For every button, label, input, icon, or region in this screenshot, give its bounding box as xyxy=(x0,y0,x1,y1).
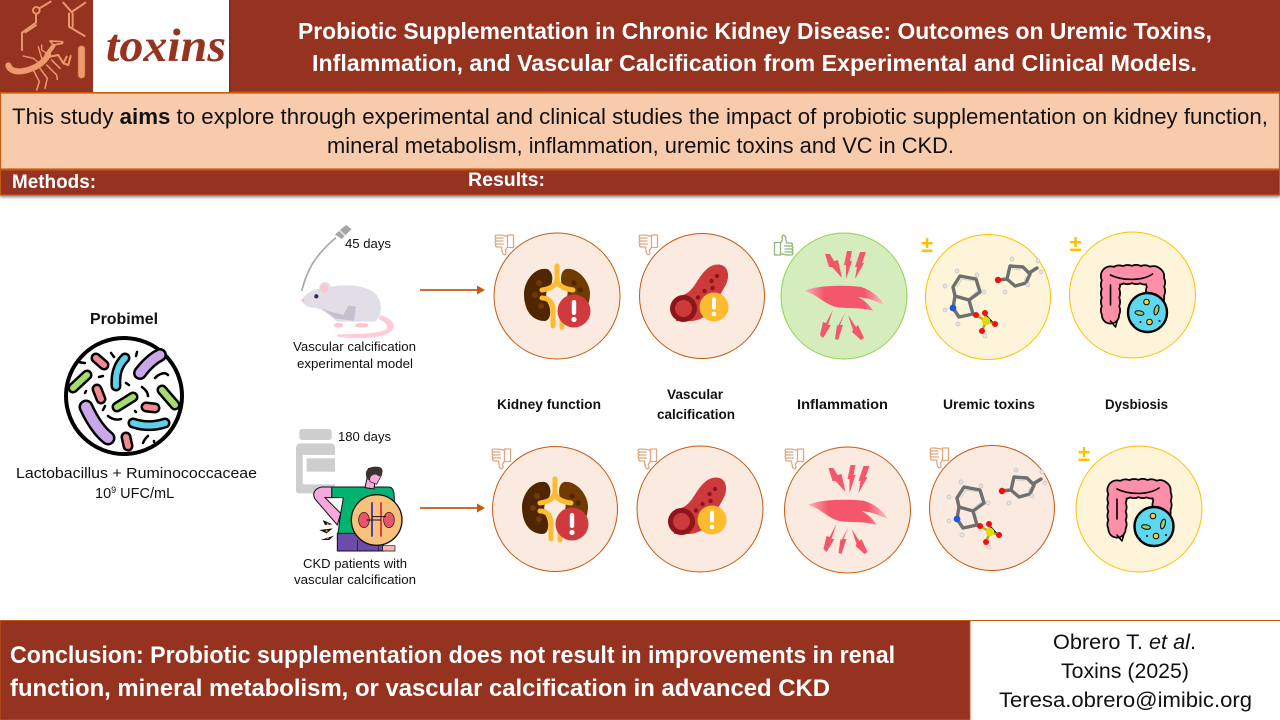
arrow: mouse to results xyxy=(420,286,485,294)
experimental model: mouse: Vascular calcification xyxy=(293,339,416,354)
conclusion panel xyxy=(0,620,970,720)
probiotic: Probimel: 10 xyxy=(95,486,111,502)
icon: syringe and mouse xyxy=(301,225,394,338)
result: dysbiosis, experimental xyxy=(1069,231,1196,358)
outcome labels: Dysbiosis xyxy=(1105,396,1168,412)
citation box xyxy=(970,620,1280,712)
conclusion panel: Conclusion: Probiotic supplementation does not result in improvements in renal xyxy=(10,642,895,669)
result: dysbiosis, clinical xyxy=(1076,441,1202,572)
result: uremic toxins, clinical xyxy=(930,446,1054,570)
journal logo: toxins xyxy=(0,0,230,92)
outcome labels: Inflammation xyxy=(797,396,888,412)
probiotic: Probimel xyxy=(16,311,257,502)
clinical model: patient: vascular calcification xyxy=(294,572,416,587)
outcome labels xyxy=(497,386,1168,422)
outcome labels: Kidney function xyxy=(497,396,601,412)
probiotic: Probimel: Probimel xyxy=(90,311,158,328)
clinical model: patient xyxy=(294,429,416,587)
experimental model: mouse: 45 days xyxy=(345,236,391,251)
citation box: Obrero T. et al. xyxy=(1053,631,1196,654)
aim statement panel: mineral metabolism, inflammation, uremic toxins and VC in CKD. xyxy=(327,133,954,158)
section bar: methods and results: Results: xyxy=(468,170,545,191)
section bar: methods and results xyxy=(0,170,1280,195)
conclusion panel: function, mineral metabolism, or vascular calcification in advanced CKD xyxy=(10,675,830,702)
journal logo: toxins: toxins xyxy=(106,20,226,72)
experimental model: mouse xyxy=(293,225,416,371)
probiotic: Probimel: 9 xyxy=(111,485,116,495)
arrow: patient to results xyxy=(420,504,485,512)
result: inflammation, experimental xyxy=(774,233,907,359)
citation box: Teresa.obrero@imibic.org xyxy=(999,689,1252,712)
header band xyxy=(0,0,1280,93)
probiotic: Probimel: UFC/mL xyxy=(116,486,174,502)
title xyxy=(298,18,1212,76)
probiotic: Probimel: Lactobacillus + Ruminococcaceae xyxy=(16,466,257,482)
title: Inflammation, and Vascular Calcification from Experimental and Clinical Models. xyxy=(312,50,1197,76)
citation box: Toxins (2025) xyxy=(1061,660,1189,683)
clinical model: patient: 180 days xyxy=(338,429,391,444)
result: inflammation, clinical xyxy=(784,447,910,573)
outcome labels: calcification xyxy=(657,406,735,422)
outcome labels: Uremic toxins xyxy=(943,396,1035,412)
clinical model: patient: CKD patients with xyxy=(303,556,407,571)
result: vascular calcification, experimental xyxy=(639,234,764,358)
title: Probiotic Supplementation in Chronic Kidney Disease: Outcomes on Uremic Toxins, xyxy=(298,18,1212,44)
section bar: methods and results: Methods: xyxy=(12,172,96,193)
aim statement panel: This study aims to explore through experimental and clinical studies the impact of probiotic supplementation on kidney function, xyxy=(12,104,1268,129)
result: dysbiosis, clinical: ± xyxy=(1078,441,1090,466)
result: dysbiosis, experimental: ± xyxy=(1069,231,1082,256)
icon: pill bottle and patient xyxy=(296,429,402,551)
icon: bacteria in circle xyxy=(66,338,182,454)
result: vascular calcification, clinical xyxy=(637,446,763,572)
experimental model: mouse: experimental model xyxy=(297,356,413,371)
results row: experimental xyxy=(494,231,1196,360)
result: uremic toxins, experimental: ± xyxy=(921,232,933,257)
outcome labels: Vascular xyxy=(667,386,724,402)
result: uremic toxins, experimental xyxy=(921,232,1050,360)
aim statement panel xyxy=(0,93,1280,169)
result: kidney function, experimental xyxy=(494,233,620,359)
result: kidney function, clinical xyxy=(492,446,618,572)
results row: clinical xyxy=(492,441,1202,573)
